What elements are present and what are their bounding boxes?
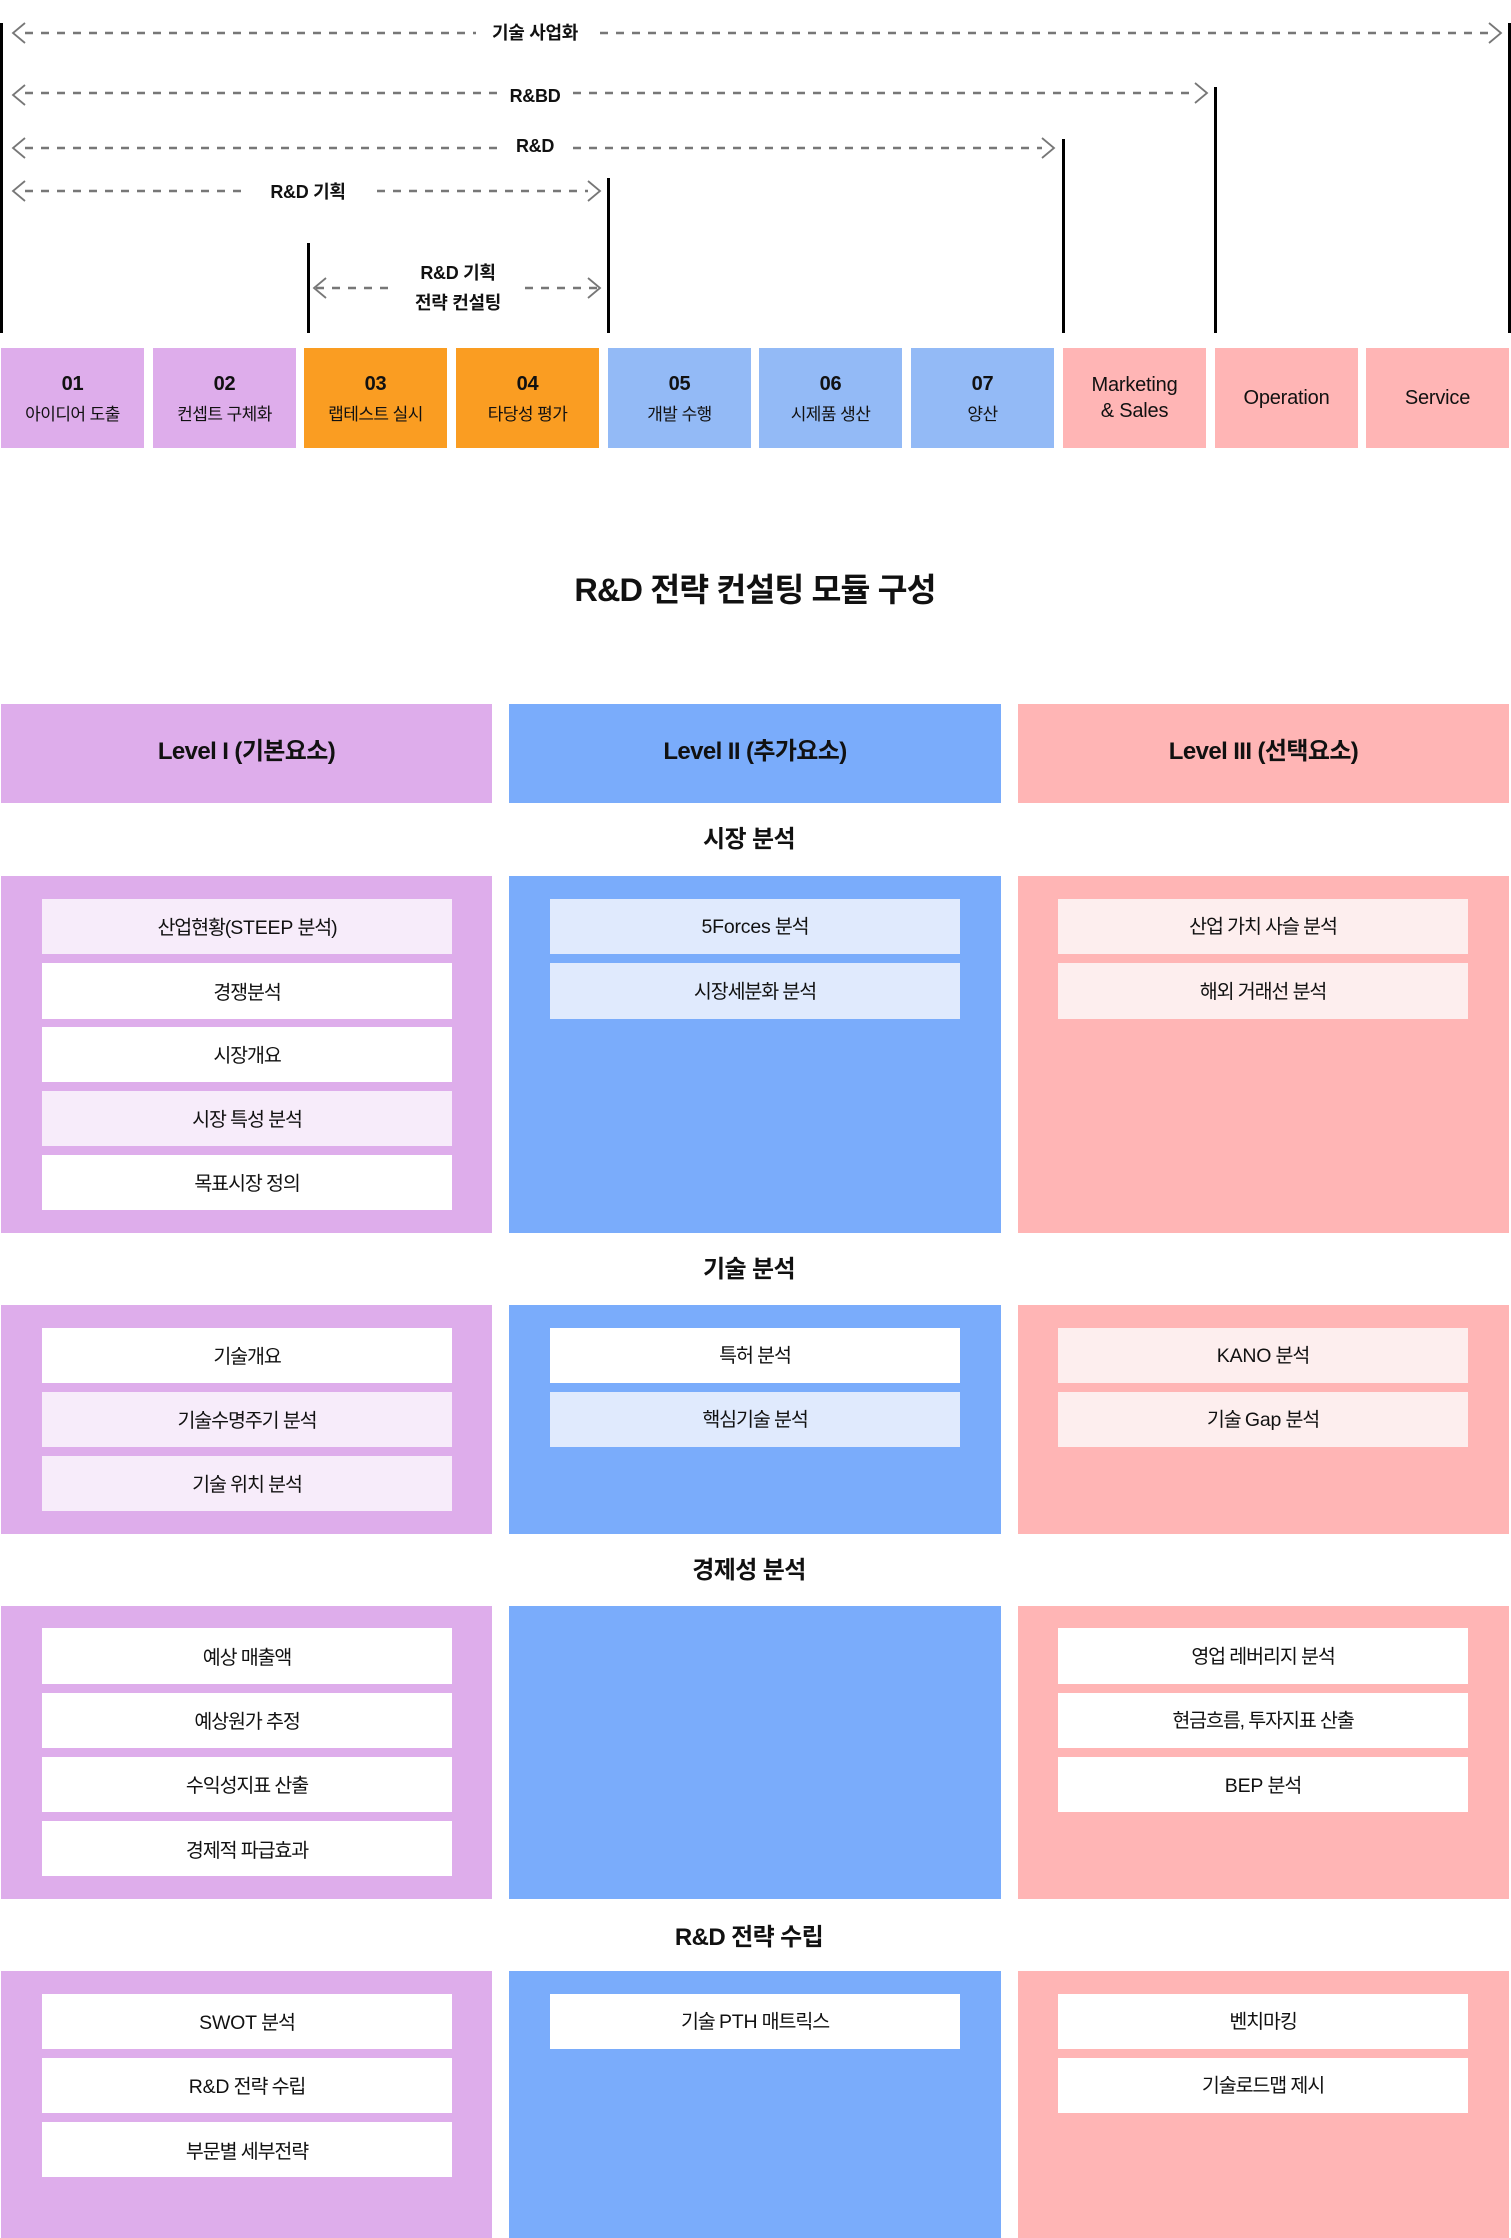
item bbox=[1058, 1994, 1468, 2049]
boundary line: end of 기술 사업화 bbox=[1508, 23, 1511, 333]
step 06: 시제품 생산 bbox=[791, 405, 870, 424]
item bbox=[42, 1693, 452, 1748]
item: PTH bbox=[719, 2011, 757, 2033]
item bbox=[550, 1328, 960, 1383]
item: 경제적 파급효과 bbox=[186, 1840, 308, 1862]
item bbox=[42, 1328, 452, 1383]
step 02: 컨셉트 구체화 bbox=[177, 405, 272, 424]
item: 분석 bbox=[775, 916, 809, 938]
item bbox=[42, 1091, 452, 1146]
item: 산업현황( 분석) bbox=[157, 917, 337, 939]
step 05: 05 bbox=[669, 373, 690, 395]
item bbox=[1058, 1628, 1468, 1684]
item: KANO bbox=[1217, 1345, 1271, 1367]
panel: 시장 분석 Level II bbox=[509, 876, 1001, 1233]
item: 현금흐름, 투자지표 산출 bbox=[1172, 1710, 1354, 1732]
step 05: 개발 수행 bbox=[647, 405, 712, 424]
item: 산업 가치 사슬 분석 bbox=[1189, 916, 1337, 938]
item bbox=[42, 1027, 452, 1082]
item bbox=[42, 1821, 452, 1876]
item: 예상 매출액 bbox=[203, 1647, 291, 1669]
boundary line: end of R&BD bbox=[1214, 87, 1217, 333]
panel: R&D 전략 수립 Level III bbox=[1018, 1971, 1509, 2238]
step 06 bbox=[759, 348, 902, 448]
item: 5Forces bbox=[701, 916, 771, 938]
item: 기술개요 bbox=[213, 1346, 281, 1368]
panel: 경제성 분석 Level III bbox=[1018, 1606, 1509, 1899]
step 01 bbox=[1, 348, 144, 448]
arrow: R&BD range: R&BD bbox=[510, 86, 561, 106]
item bbox=[42, 963, 452, 1019]
arrow: R&D range: R&D bbox=[516, 136, 554, 156]
item bbox=[1058, 1392, 1468, 1447]
step: Marketing & Sales: & Sales bbox=[1101, 400, 1168, 422]
step 02: 02 bbox=[214, 373, 235, 395]
item bbox=[550, 963, 960, 1019]
item bbox=[42, 2122, 452, 2177]
item bbox=[1058, 1328, 1468, 1383]
step 07: 양산 bbox=[967, 405, 998, 424]
arrow: R&D 기획 range bbox=[13, 181, 600, 202]
boundary line: start of all ranges bbox=[0, 23, 3, 333]
step 07: 07 bbox=[972, 373, 993, 395]
step: Service bbox=[1366, 348, 1509, 448]
item bbox=[550, 1392, 960, 1447]
item bbox=[42, 1456, 452, 1511]
panel: 기술 분석 Level I bbox=[1, 1305, 492, 1534]
step: Operation: Operation bbox=[1243, 387, 1330, 409]
item bbox=[42, 1392, 452, 1447]
step 03 bbox=[304, 348, 447, 448]
item bbox=[550, 899, 960, 954]
item bbox=[550, 1994, 960, 2049]
item bbox=[1058, 1757, 1468, 1812]
item: 분석 bbox=[261, 2012, 295, 2034]
item bbox=[42, 1994, 452, 2049]
panel: 경제성 분석 Level II (empty) bbox=[509, 1606, 1001, 1899]
panel: 기술 분석 Level III bbox=[1018, 1305, 1509, 1534]
item: 기술수명주기 분석 bbox=[177, 1410, 317, 1432]
item bbox=[1058, 963, 1468, 1019]
item: 경쟁분석 bbox=[213, 982, 281, 1004]
item: 시장세분화 분석 bbox=[694, 981, 816, 1003]
item: 특허 분석 bbox=[719, 1345, 791, 1367]
step: Operation bbox=[1215, 348, 1358, 448]
level header: Level III bbox=[1018, 704, 1509, 803]
step 01: 01 bbox=[62, 373, 83, 395]
item: 분석 bbox=[1276, 1345, 1309, 1367]
item: BEP bbox=[1225, 1775, 1263, 1797]
arrow: R&D 기획 전략 컨설팅 range: R&D 기획 bbox=[420, 263, 496, 283]
item: Gap bbox=[1245, 1409, 1281, 1431]
panel: 기술 분석 Level II bbox=[509, 1305, 1001, 1534]
item bbox=[1058, 2058, 1468, 2113]
step: Marketing & Sales: Marketing bbox=[1091, 374, 1178, 396]
item bbox=[42, 1155, 452, 1210]
item: 기술로드맵 제시 bbox=[1202, 2075, 1324, 2097]
panel: R&D 전략 수립 Level II bbox=[509, 1971, 1001, 2238]
item: STEEP bbox=[230, 917, 293, 939]
level header: Level III: Level III (선택요소) bbox=[1169, 738, 1358, 765]
step: Service: Service bbox=[1405, 387, 1470, 409]
section heading: 경제성 분석: 경제성 분석 bbox=[692, 1557, 806, 1584]
arrow: 기술 사업화 range: 기술 사업화 bbox=[492, 23, 579, 43]
level header: Level II: Level II (추가요소) bbox=[663, 738, 847, 765]
item: 목표시장 정의 bbox=[194, 1173, 300, 1195]
arrow: 기술 사업화 range bbox=[13, 23, 1501, 43]
arrow: R&D 기획 전략 컨설팅 range: 전략 컨설팅 bbox=[415, 293, 501, 313]
panel: 경제성 분석 Level I bbox=[1, 1606, 492, 1899]
level header: Level II bbox=[509, 704, 1001, 803]
item: 수익성지표 산출 bbox=[186, 1775, 308, 1797]
step 02 bbox=[153, 348, 296, 448]
item bbox=[1058, 1693, 1468, 1748]
step 01: 아이디어 도출 bbox=[25, 405, 120, 424]
level header: Level I bbox=[1, 704, 492, 803]
item: 분석 bbox=[1268, 1775, 1301, 1797]
item: 해외 거래선 분석 bbox=[1200, 981, 1326, 1003]
item bbox=[42, 2058, 452, 2113]
item: 영업 레버리지 분석 bbox=[1191, 1646, 1335, 1668]
boundary line: end of R&D bbox=[1062, 139, 1065, 333]
scope diagram: nested range arrows bbox=[0, 22, 1511, 333]
step 04: 04 bbox=[517, 373, 538, 395]
boundary line: start of 전략 컨설팅 bbox=[307, 243, 310, 333]
item: 기술 분석 bbox=[1207, 1409, 1319, 1431]
item: R&D bbox=[189, 2076, 229, 2098]
item bbox=[1058, 899, 1468, 954]
item: 시장 특성 분석 bbox=[192, 1109, 302, 1131]
step 07 bbox=[911, 348, 1054, 448]
step 03: 랩테스트 실시 bbox=[328, 405, 423, 424]
section heading: R&D 전략 수립: R&D 전략 수립 bbox=[675, 1924, 823, 1951]
arrow: R&D 기획 전략 컨설팅 range bbox=[314, 263, 600, 313]
panel: 시장 분석 Level III bbox=[1018, 876, 1509, 1233]
level header: Level I: Level I (기본요소) bbox=[158, 738, 335, 765]
step 03: 03 bbox=[365, 373, 386, 395]
step: Marketing & Sales bbox=[1063, 348, 1206, 448]
arrow: R&D 기획 range: R&D 기획 bbox=[270, 182, 346, 202]
step 06: 06 bbox=[820, 373, 841, 395]
item: 기술 위치 분석 bbox=[192, 1474, 302, 1496]
item: 부문별 세부전략 bbox=[186, 2141, 308, 2163]
item: 전략 수립 bbox=[234, 2076, 305, 2098]
step 04: 타당성 평가 bbox=[488, 405, 567, 424]
arrow: R&D range bbox=[13, 136, 1054, 158]
item: 기술 매트릭스 bbox=[681, 2011, 829, 2033]
item bbox=[42, 899, 452, 954]
item: 예상원가 추정 bbox=[194, 1711, 300, 1733]
arrow: R&BD range bbox=[13, 83, 1207, 106]
title: R&D 전략 컨설팅 모듈 구성 bbox=[574, 572, 936, 608]
item: SWOT bbox=[199, 2012, 257, 2034]
step 04 bbox=[456, 348, 599, 448]
item bbox=[42, 1628, 452, 1684]
boundary line: end of R&D 기획 bbox=[607, 178, 610, 333]
item bbox=[42, 1757, 452, 1812]
section heading: 기술 분석: 기술 분석 bbox=[703, 1256, 795, 1283]
panel: 시장 분석 Level I bbox=[1, 876, 492, 1233]
item: 핵심기술 분석 bbox=[702, 1409, 808, 1431]
section heading: 시장 분석: 시장 분석 bbox=[703, 826, 795, 853]
item: 시장개요 bbox=[213, 1045, 281, 1067]
step 05 bbox=[608, 348, 751, 448]
panel: R&D 전략 수립 Level I bbox=[1, 1971, 492, 2238]
item: 벤치마킹 bbox=[1229, 2011, 1297, 2033]
